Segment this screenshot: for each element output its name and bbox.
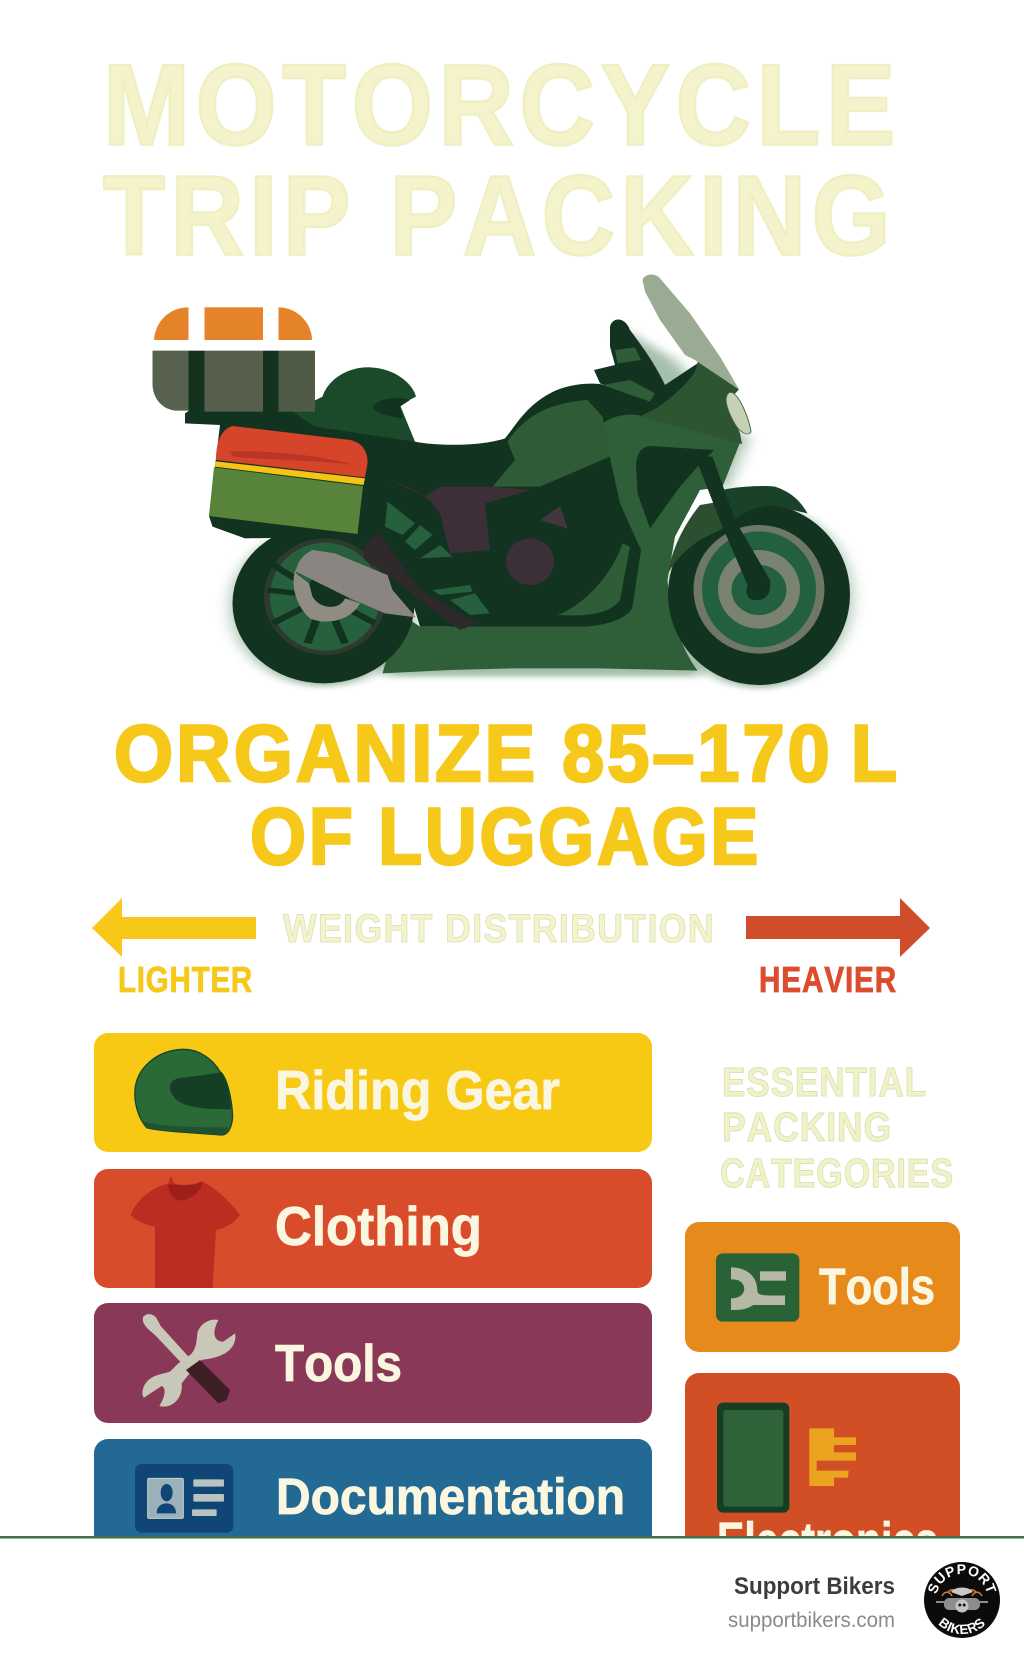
label: Electronics <box>717 1512 938 1569</box>
subtitle <box>114 709 900 882</box>
panel: documentation <box>94 1439 652 1564</box>
top case <box>152 307 315 412</box>
windscreen <box>642 275 739 389</box>
dark frame silhouette <box>185 384 670 633</box>
arrow: heavier <box>746 898 930 957</box>
headlight <box>726 392 751 434</box>
arrow: lighter <box>92 898 256 957</box>
engine block <box>363 480 568 630</box>
helmet on seat <box>292 367 416 442</box>
front fork <box>695 457 770 600</box>
illustration: loaded touring motorcycle <box>152 275 852 688</box>
label: heavier: HEAVIER <box>759 959 897 1000</box>
side pannier <box>209 426 368 534</box>
front mudguard <box>668 486 808 575</box>
label: Tools <box>819 1258 935 1315</box>
engine guard <box>558 543 630 615</box>
fairing <box>640 362 742 444</box>
spoke highlights behind engine <box>385 502 490 615</box>
logo badge: SUPPORT <box>928 1564 996 1594</box>
subtitle: OF LUGGAGE <box>250 792 761 882</box>
label: Clothing <box>275 1195 482 1257</box>
heading: essential packing categories: PACKING <box>722 1104 892 1150</box>
icon: id card <box>135 1464 233 1533</box>
title: TRIP PACKING <box>103 152 896 278</box>
title <box>103 42 901 278</box>
panel: tools <box>94 1303 652 1423</box>
inner frame window <box>636 446 714 528</box>
icon: wrench and screwdriver <box>142 1314 235 1407</box>
icon: phone <box>717 1403 789 1513</box>
soft glow around motorcycle <box>231 327 852 688</box>
footer <box>0 1536 1024 1638</box>
label: Riding Gear <box>275 1059 560 1121</box>
label: Documentation <box>276 1468 625 1525</box>
front wheel <box>668 504 850 685</box>
exhaust pipe <box>294 550 416 621</box>
heading: essential packing categories <box>720 1059 954 1196</box>
icon: wrench tile <box>716 1253 799 1322</box>
panel: electronics category <box>685 1373 960 1569</box>
icon: charger plug <box>809 1428 856 1486</box>
rear wheel <box>232 523 414 683</box>
handlebar and mirror <box>594 320 698 407</box>
label: lighter: LIGHTER <box>118 959 253 1000</box>
subtitle: ORGANIZE 85–170 L <box>114 709 900 799</box>
icon: t-shirt <box>131 1176 240 1288</box>
label: Tools <box>275 1335 402 1393</box>
heading: essential packing categories: CATEGORIES <box>720 1150 954 1196</box>
fuel tank <box>492 400 610 487</box>
title: MOTORCYCLE <box>103 42 901 170</box>
icon: helmet <box>135 1049 233 1135</box>
panel: tools category <box>685 1222 960 1352</box>
green body panel <box>382 415 740 673</box>
heading: essential packing categories: ESSENTIAL <box>722 1059 927 1105</box>
logo badge <box>924 1562 1000 1638</box>
logo badge: BIKERS <box>938 1617 984 1634</box>
panel: clothing <box>94 1169 652 1288</box>
footer url: supportbikers.com <box>728 1609 895 1632</box>
weight distribution heading: WEIGHT DISTRIBUTION <box>283 907 715 951</box>
footer brand name: Support Bikers <box>734 1573 895 1600</box>
panel: riding gear <box>94 1033 652 1152</box>
